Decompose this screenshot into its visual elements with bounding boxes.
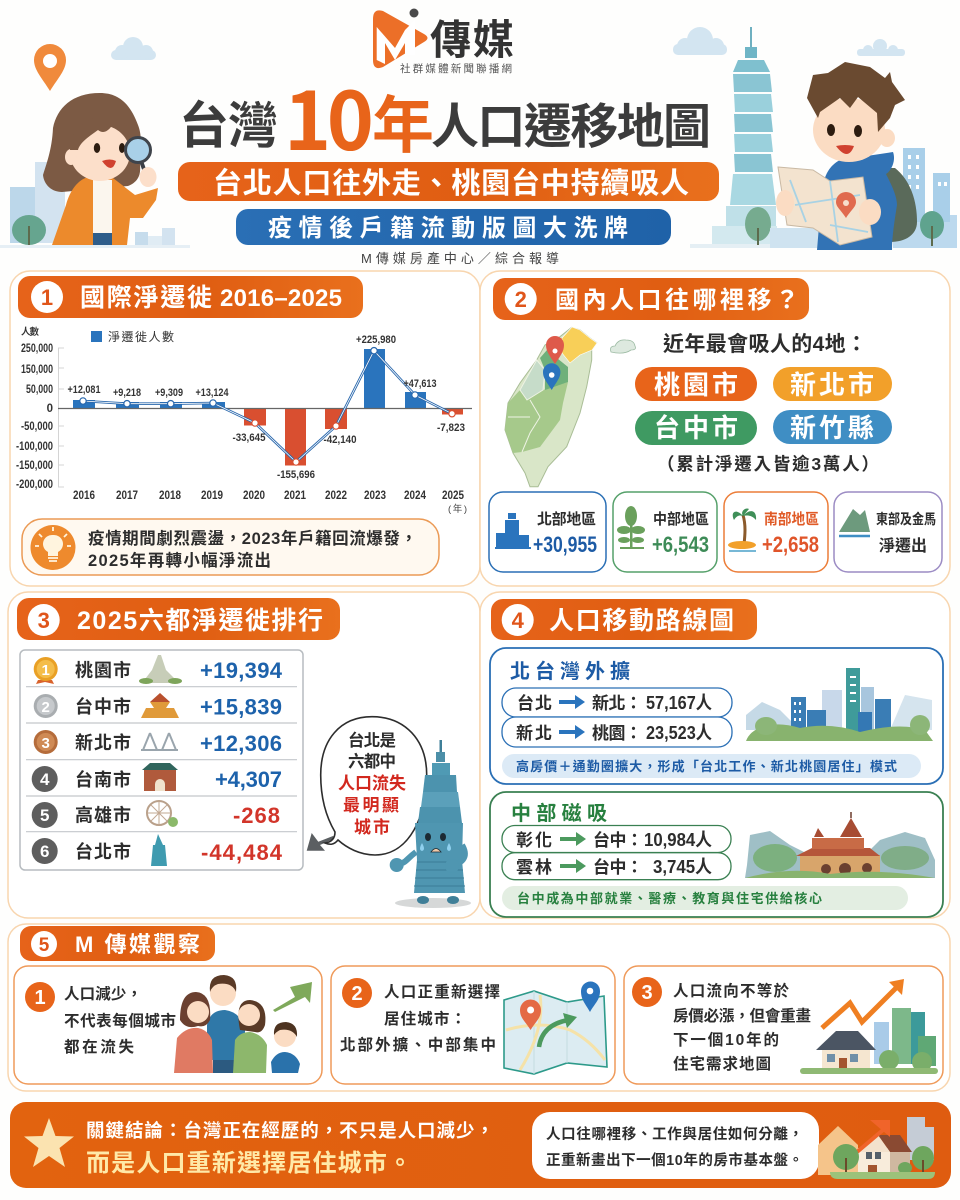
callout: white bubble: 正重新畫出下一個10年的房市基本盤。 — [546, 1151, 803, 1169]
bar chart: net migration: +13,124 — [196, 387, 229, 399]
card: observation 2: 居住城市： — [384, 1009, 466, 1028]
row: New Taipei: 新北市 — [75, 732, 131, 753]
panel 1 heading — [18, 276, 363, 318]
speech bubble: 城市 — [354, 817, 390, 837]
speech bubble: 六都中 — [348, 752, 396, 771]
row: Taoyuan — [34, 655, 283, 684]
bar chart: net migration: 2020 — [243, 488, 265, 502]
callout: white bubble: 人口往哪裡移、工作與居住如何分離， — [546, 1125, 803, 1143]
card: observation 3: 3 — [641, 982, 653, 1004]
route: New Taipei to Taoyuan: 23,523人 — [646, 723, 712, 743]
card: central Taiwan attraction — [490, 792, 943, 917]
bar chart: net migration: 2024 — [404, 488, 426, 502]
header illustration: left scenery — [0, 162, 190, 248]
row: New Taipei: 3 — [42, 735, 50, 752]
row: Tainan: 台南市 — [75, 769, 131, 790]
card: northern region — [489, 492, 606, 572]
card: east and islands: 淨遷出 — [879, 537, 927, 555]
logo mark — [373, 8, 428, 68]
row: Taipei: 6 — [40, 842, 49, 861]
bar chart: net migration: 2016 — [73, 488, 95, 502]
panel 3: six municipalities ranking — [8, 592, 480, 918]
card: northern region: +30,955 — [533, 532, 597, 557]
bar chart: net migration: +9,309 — [155, 387, 183, 399]
card: northern region: 北部地區 — [537, 510, 596, 528]
row: Taichung — [34, 693, 282, 720]
card: northern Taiwan expansion — [490, 648, 943, 784]
bar chart: net migration: 2023 — [364, 488, 386, 502]
card: observation 3: 人口流向不等於 — [673, 981, 789, 1000]
title: 台灣 — [179, 86, 278, 158]
tag: New Taipei: 新北市 — [790, 370, 874, 400]
row: Taichung: 台中市 — [75, 696, 131, 717]
bar chart: net migration: 2018 — [159, 488, 181, 502]
icon: plant — [617, 506, 645, 549]
card: observation 2: 人口正重新選擇 — [384, 982, 500, 1001]
panel 4 heading: 4 — [512, 608, 525, 633]
bar chart: net migration: -50,000 — [21, 421, 53, 433]
panel 2 heading — [493, 278, 809, 320]
illustration: folded map — [504, 982, 607, 1074]
card: observation 2: 2 — [351, 983, 363, 1005]
title: 人口遷移地圖 — [431, 87, 711, 157]
row: New Taipei: +12,306 — [200, 731, 282, 756]
byline: M傳媒房產中心／綜合報導 — [361, 251, 559, 266]
panel 1 heading: 國際淨遷徙 — [80, 284, 212, 312]
subtitle banner: orange: 台北人口往外走、桃園台中持續吸人 — [213, 166, 689, 200]
card: observation 1: 1 — [34, 987, 46, 1009]
icon: arrow to table — [307, 833, 335, 851]
row: Kaohsiung — [32, 801, 280, 828]
illustration: house — [818, 1117, 935, 1179]
illustration: city skyline — [746, 668, 933, 741]
panel 5 heading — [20, 926, 215, 961]
speech bubble — [321, 717, 427, 855]
map of Taiwan — [505, 327, 597, 487]
route: New Taipei to Taoyuan — [502, 717, 732, 747]
card: southern region: +2,658 — [762, 532, 819, 557]
speech bubble: 人口流失 — [338, 773, 406, 793]
icon: palm tree — [728, 509, 756, 551]
illustration: boy with map — [776, 62, 917, 250]
illustration: Taipei 101 tower — [690, 27, 820, 248]
bar chart: net migration: 2017 — [116, 488, 138, 502]
route: Yunlin to Taichung — [502, 853, 731, 880]
subtitle banner: blue — [236, 209, 671, 245]
map pin: blue — [543, 363, 560, 390]
route: Changhua to Taichung: 10,984人 — [644, 830, 712, 850]
route: Changhua to Taichung: 台中： — [593, 830, 643, 850]
bar chart: net migration: 2025 — [442, 488, 464, 502]
tag: Taichung — [635, 411, 757, 445]
bar chart: net migration: 2019 — [201, 488, 223, 502]
card: observation 3: 下一個10年的 — [673, 1030, 779, 1049]
bar chart: net migration: 0 — [47, 403, 53, 415]
title — [179, 58, 711, 174]
speech bubble: 最明顯 — [343, 796, 399, 815]
card: central Taiwan attraction: 中部磁吸 — [511, 802, 607, 825]
bar chart: net migration — [16, 326, 472, 515]
bar chart: net migration: 50,000 — [26, 384, 53, 396]
note: cumulative net inflow: （累計淨遷入皆逾3萬人） — [657, 454, 879, 474]
row: Kaohsiung: 高雄市 — [75, 804, 131, 826]
tag: Hsinchu County — [773, 410, 892, 444]
row: Taichung: +15,839 — [200, 694, 282, 720]
speech bubble: 台北是 — [348, 730, 396, 750]
note: Taichung core: 台中成為中部就業、醫療、教育與住宅供給核心 — [517, 891, 822, 906]
panel 2 heading: 國內人口往哪裡移？ — [555, 287, 799, 314]
route: Taipei to New Taipei: 新北： — [592, 693, 642, 713]
tag: Hsinchu County: 新竹縣 — [790, 413, 874, 443]
icon: star — [24, 1118, 74, 1167]
card: central region: +6,543 — [652, 532, 709, 557]
tag: Taoyuan — [635, 367, 757, 401]
card: observation 1 — [14, 966, 322, 1084]
bar chart: net migration: +9,218 — [113, 387, 141, 399]
card: east and islands — [834, 492, 942, 572]
bar chart: net migration: +47,613 — [404, 378, 436, 390]
logo wordmark: 傳媒 — [430, 6, 514, 66]
card: southern region: 南部地區 — [764, 510, 819, 528]
card: northern Taiwan expansion: 北台灣外擴 — [510, 659, 630, 683]
card: observation 2: 北部外擴、中部集中 — [340, 1035, 496, 1054]
icon: rising arrow — [273, 982, 312, 1012]
row: New Taipei — [34, 730, 282, 756]
panel 2 heading: 2 — [515, 287, 527, 312]
note: commute pattern — [502, 754, 921, 778]
bar chart: net migration: 250,000 — [21, 343, 53, 355]
card: observation 3: 住宅需求地圖 — [673, 1054, 771, 1073]
route: Yunlin to Taichung: 3,745人 — [653, 857, 712, 877]
panel 3 heading — [17, 598, 340, 640]
bar chart: net migration: -33,645 — [232, 432, 266, 444]
panel 4 heading — [491, 599, 757, 640]
bar chart: net migration: 150,000 — [21, 364, 53, 376]
row: Kaohsiung: 5 — [40, 806, 49, 825]
panel 5: M Media observations — [8, 924, 950, 1091]
row: Tainan: 4 — [40, 770, 50, 789]
conclusion text — [86, 1120, 494, 1177]
illustration: temple in hills — [745, 812, 935, 878]
chart legend: 淨遷徙人數 — [108, 330, 174, 344]
bar chart: net migration: 人數 — [21, 326, 39, 338]
route: Taipei to New Taipei: 台北 — [517, 693, 552, 713]
note: Taichung core — [502, 886, 908, 910]
illustration: house and rising trend — [800, 979, 938, 1074]
card: east and islands: 東部及金馬 — [876, 511, 936, 527]
bar chart: net migration: -7,823 — [437, 422, 465, 434]
icon: map pin — [34, 44, 66, 91]
illustration: girl with magnifier — [43, 93, 158, 245]
tag: New Taipei — [773, 367, 892, 401]
panel 5 heading: 5 — [39, 935, 50, 956]
title: 10 — [284, 58, 374, 174]
panel 2: domestic migration — [480, 271, 950, 586]
logo — [373, 6, 514, 75]
illustration: right scenery — [770, 148, 957, 248]
bar chart: net migration: -200,000 — [16, 479, 53, 491]
illustration: family — [174, 975, 300, 1073]
callout: white bubble — [532, 1112, 831, 1179]
route: Taipei to New Taipei: 57,167人 — [646, 693, 712, 713]
panel 3 heading: 2025六都淨遷徙排行 — [77, 607, 323, 635]
bar chart: net migration: -150,000 — [16, 460, 53, 472]
ranking table — [20, 650, 303, 870]
route: Changhua to Taichung: 彰化 — [516, 830, 552, 850]
row: Tainan: +4,307 — [215, 767, 282, 792]
route: Changhua to Taichung — [502, 826, 731, 852]
bar chart: net migration: +12,081 — [68, 384, 100, 396]
card: observation 3 — [624, 966, 943, 1084]
row: Taoyuan: 1 — [42, 662, 50, 679]
tag: Taichung: 台中市 — [654, 413, 738, 443]
icon: light bulb — [30, 525, 76, 570]
bar chart: net migration: -155,696 — [277, 469, 315, 481]
row: Taichung: 2 — [42, 699, 50, 716]
cloud — [610, 340, 636, 353]
card: central region — [613, 492, 717, 572]
row: Taipei — [32, 834, 283, 866]
logo tagline: 社群媒體新聞聯播網 — [400, 62, 512, 75]
icon: mountains — [839, 509, 870, 536]
panel 4 heading: 人口移動路線圖 — [549, 607, 734, 635]
callout: chart insight: 2025年再轉小幅淨流出 — [88, 550, 271, 570]
panel 5 heading: M 傳媒觀察 — [75, 932, 200, 957]
route: Taipei to New Taipei — [502, 688, 732, 717]
icon: buildings — [495, 513, 531, 549]
card: central region: 中部地區 — [653, 510, 709, 528]
callout: chart insight: 疫情期間劇烈震盪，2023年戶籍回流爆發， — [88, 528, 417, 548]
panel 3 heading: 3 — [38, 608, 50, 633]
route: New Taipei to Taoyuan: 桃園： — [592, 724, 642, 743]
bar chart: net migration: -42,140 — [324, 434, 356, 446]
tag: Taoyuan: 桃園市 — [654, 370, 738, 400]
bar chart: net migration: (年) — [448, 503, 467, 515]
callout: chart insight — [22, 519, 439, 575]
card: observation 1: 不代表每個城市 — [64, 1011, 176, 1030]
clouds — [111, 27, 905, 60]
bar chart: net migration: +225,980 — [356, 334, 396, 346]
card: observation 2 — [331, 966, 615, 1084]
panel 1 heading: 1 — [41, 285, 53, 310]
mascot: crying Taipei 101 — [390, 740, 471, 908]
note: commute pattern: 高房價＋通勤圈擴大，形成「台北工作、新北桃園居住」模式 — [516, 759, 897, 774]
bar chart: net migration: 2021 — [284, 488, 306, 502]
subtitle banner: blue: 疫情後戶籍流動版圖大洗牌 — [268, 215, 628, 242]
card: southern region — [724, 492, 828, 572]
route: New Taipei to Taoyuan: 新北 — [516, 723, 552, 743]
conclusion banner — [10, 1102, 951, 1188]
conclusion text: 關鍵結論：台灣正在經歷的，不只是人口減少， — [86, 1120, 494, 1141]
route: Yunlin to Taichung: 台中： — [593, 857, 643, 877]
title: 年 — [372, 75, 434, 165]
row: Tainan — [32, 763, 282, 792]
bar chart: net migration: -100,000 — [16, 441, 53, 453]
panel 1: international net migration — [10, 271, 480, 586]
row: Taoyuan: +19,394 — [200, 658, 283, 683]
panel 1 heading: 2016–2025 — [220, 285, 342, 312]
bar chart: net migration: 2022 — [325, 488, 347, 502]
card: observation 1: 人口減少， — [64, 985, 142, 1003]
row: Kaohsiung: -268 — [233, 803, 280, 828]
card: observation 3: 房價必漲，但會重畫 — [673, 1006, 811, 1025]
row: Taipei: 台北市 — [75, 841, 131, 862]
route: Yunlin to Taichung: 雲林 — [516, 858, 552, 877]
row: Taipei: -44,484 — [201, 840, 283, 865]
map pin: red — [546, 336, 564, 364]
heading: top four destinations: 近年最會吸人的4地： — [663, 332, 867, 356]
card: observation 1: 都在流失 — [64, 1037, 134, 1056]
panel 4: migration routes — [480, 592, 950, 918]
row: Taoyuan: 桃園市 — [75, 660, 131, 680]
conclusion text: 而是人口重新選擇居住城市。 — [86, 1149, 412, 1177]
